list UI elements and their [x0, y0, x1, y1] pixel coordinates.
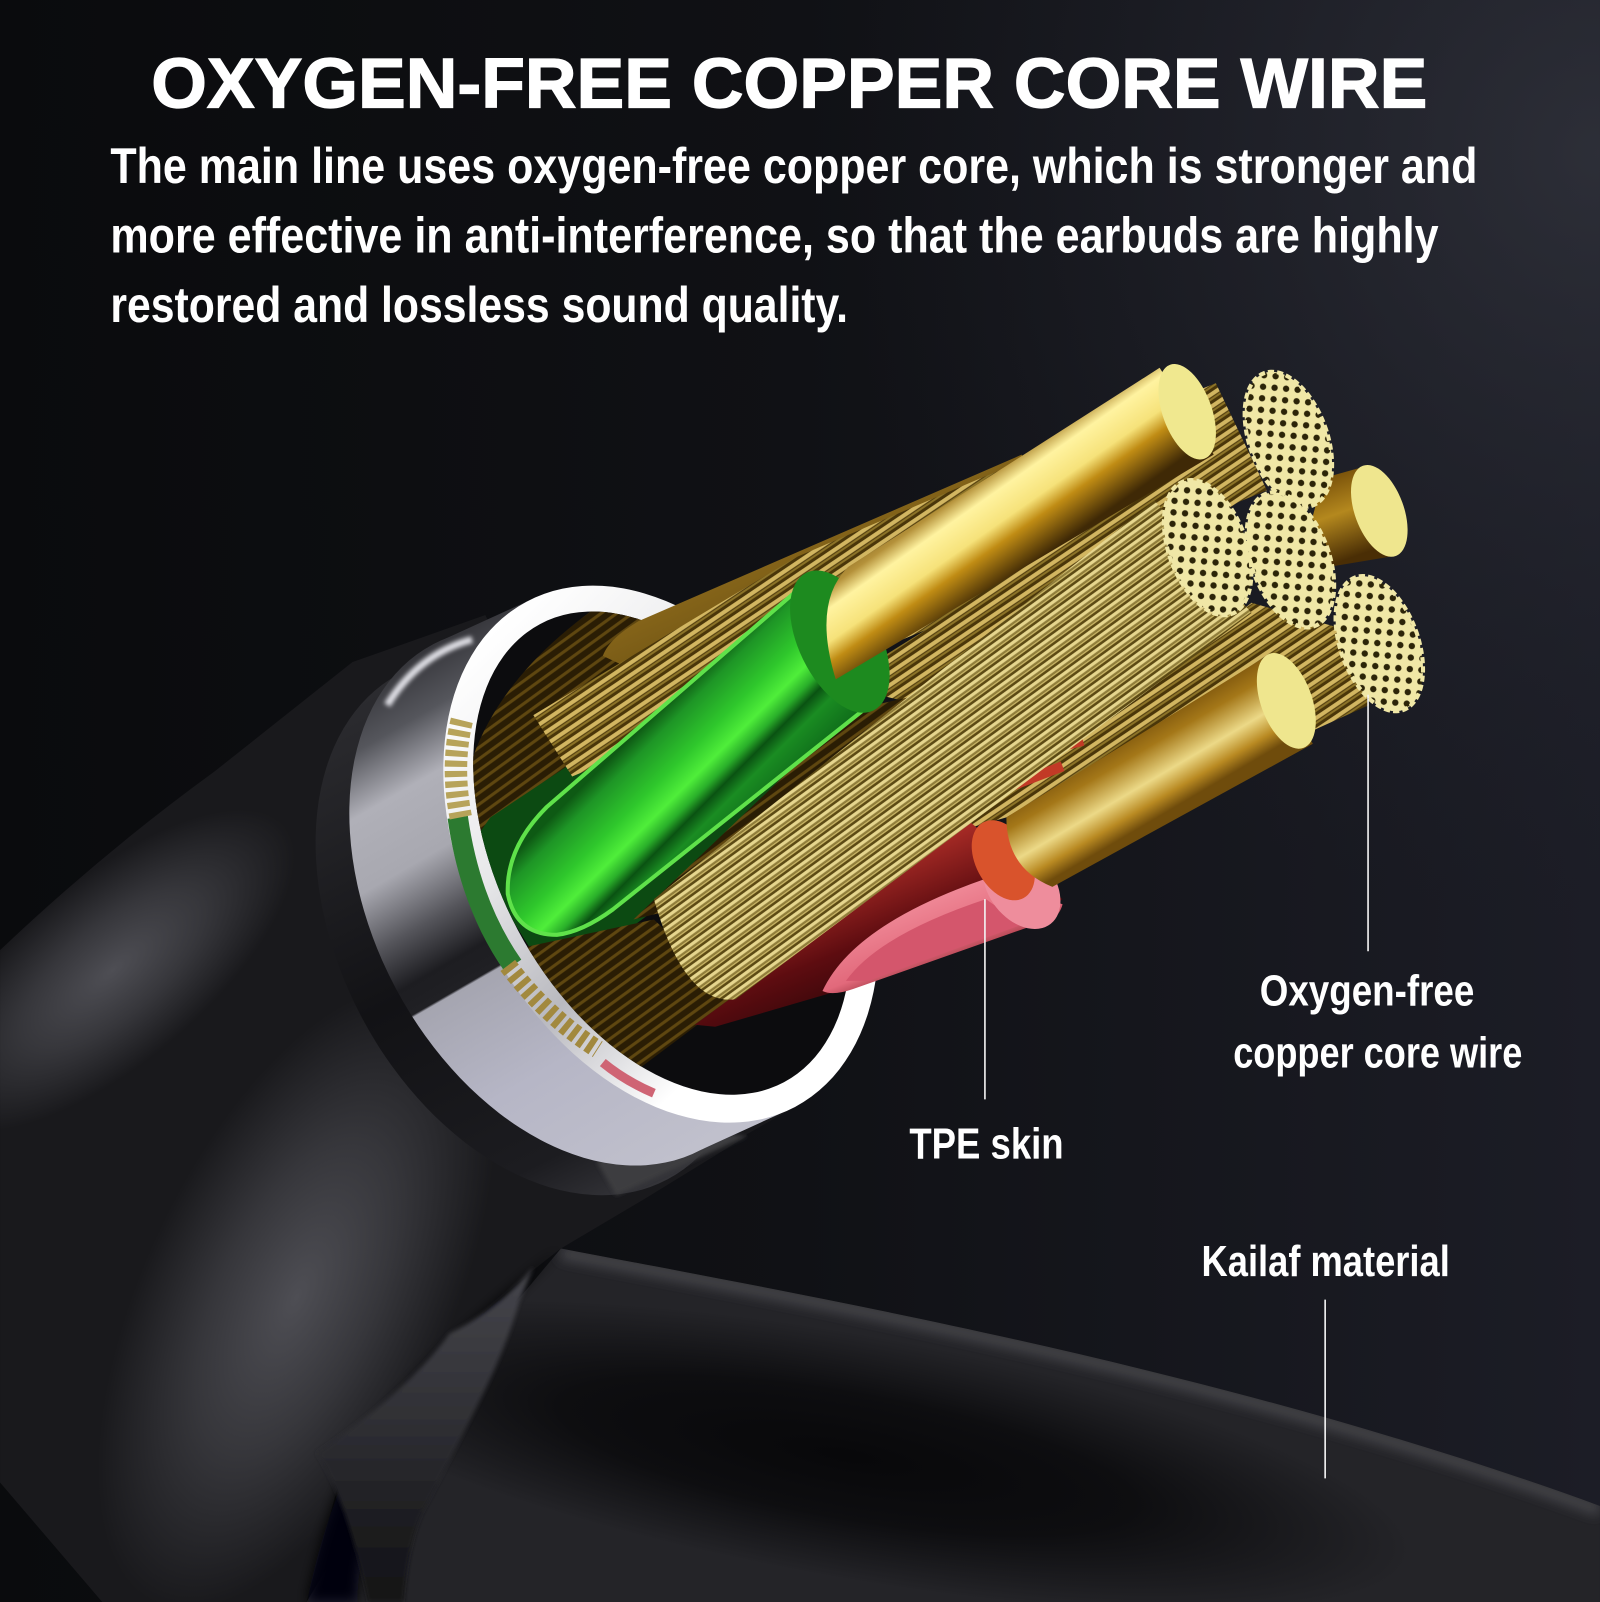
end face: lower strand cluster: [1319, 564, 1440, 723]
collar opening ring: [396, 547, 928, 1159]
callout: Kailaf material: Kailaf material: [1202, 1237, 1450, 1286]
lower cable section: [263, 1226, 1600, 1602]
strands filling gap under green wire: [633, 695, 920, 920]
green insulated wire: [508, 555, 910, 935]
collar interior wires: [473, 612, 786, 1067]
right copper wire: [1298, 457, 1419, 572]
light strip along lower cable: [317, 1267, 533, 1602]
silver collar band: [349, 602, 795, 1166]
lower collar highlight: [597, 1128, 747, 1195]
upper strand bundle: [533, 383, 1267, 776]
upper cable jacket: [0, 615, 747, 1602]
gold wire top: [826, 356, 1227, 679]
end face: middle strand cluster: [1230, 480, 1351, 639]
callout: oxygen-free copper core wire: Oxygen-free: [1260, 966, 1474, 1015]
main strand bundle: [654, 501, 1252, 1000]
end face: top strand cluster: [1228, 360, 1349, 519]
dark rim of collar: [316, 602, 795, 1195]
gold wire lower: [1006, 645, 1327, 887]
strands beside gold wire: [838, 450, 1257, 705]
title: OXYGEN-FREE COPPER CORE WIRE: [151, 43, 1427, 122]
callout: oxygen-free copper core wire: [1233, 695, 1522, 1078]
red insulated wire: [695, 741, 1083, 1027]
description text: [110, 138, 1477, 333]
callout: TPE skin: TPE skin: [909, 1120, 1064, 1169]
strands behind end faces: [777, 603, 1369, 971]
end face: front strand cluster: [1147, 468, 1268, 627]
dark crease between cables: [307, 1248, 561, 1602]
callout: oxygen-free copper core wire: copper core wire: [1233, 1029, 1522, 1078]
description text: restored and lossless sound quality.: [110, 277, 848, 333]
back copper wire: [603, 455, 1063, 685]
